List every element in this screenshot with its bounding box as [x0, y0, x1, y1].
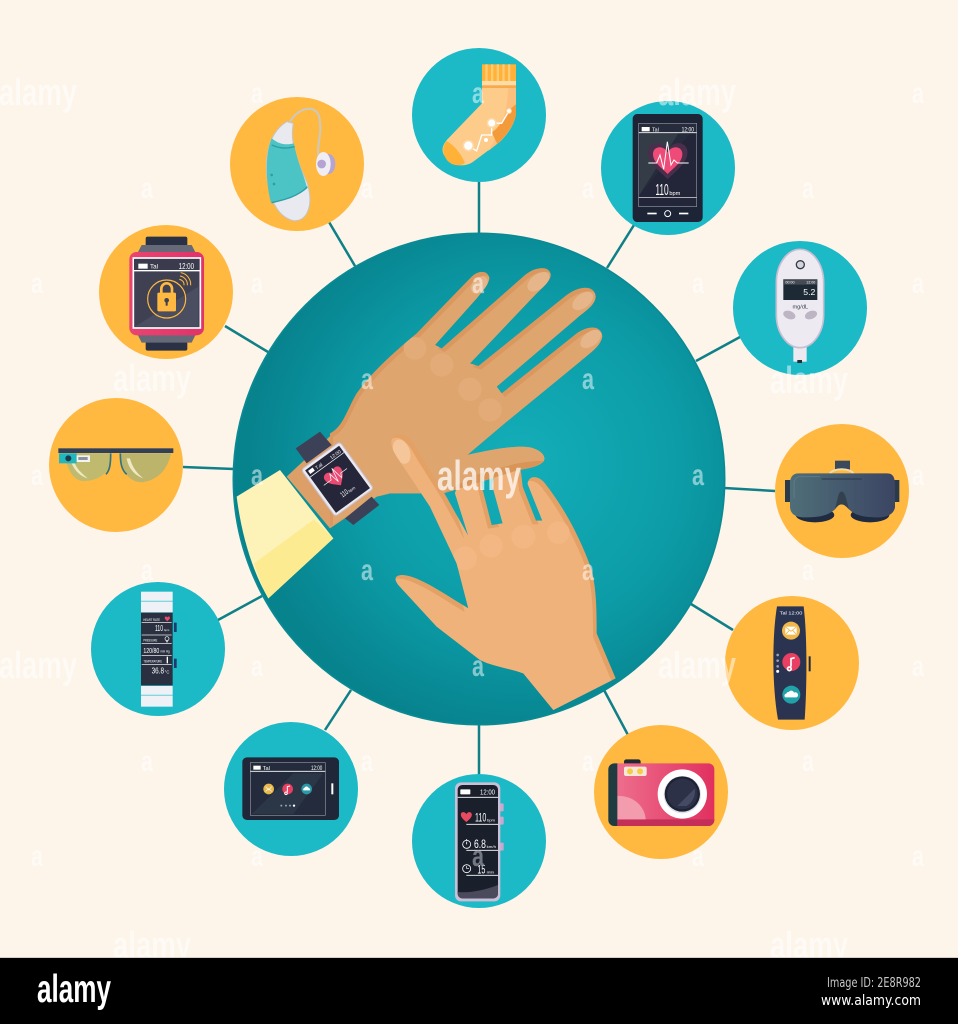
satellite: smart glasses [49, 398, 183, 532]
footer bar [0, 957, 958, 1024]
stock photo watermarks: a [31, 459, 43, 492]
satellite: fitness tracker: 15 [477, 862, 486, 876]
stock photo watermarks: alamy [0, 72, 77, 114]
satellite: VR headset [775, 424, 909, 558]
satellite: smartphone heart rate [601, 101, 735, 235]
wrist skin [287, 430, 377, 528]
satellite: smart sock [412, 48, 546, 182]
stock photo watermarks: a [692, 267, 704, 300]
stock photo watermarks: alamy [658, 72, 736, 114]
satellite: health data band: bpm [164, 628, 170, 632]
satellite: health data band: mm Hg [160, 650, 170, 654]
satellite: glucose meter: 5.2 [803, 287, 816, 297]
left hand [330, 268, 602, 526]
stock photo watermarks: a [361, 172, 373, 205]
stock photo watermarks: alamy [113, 925, 191, 967]
satellite: smartwatch with lock: 12:00 [179, 262, 194, 271]
satellite: smartphone in landscape: Tal [263, 766, 270, 772]
satellite: fitness tracker: 6.8 [474, 837, 486, 851]
stock photo watermarks: a [361, 554, 373, 587]
connector lines from center to satellites [183, 182, 775, 775]
stock photo watermarks: a [582, 554, 594, 587]
stock photo watermarks: a [912, 459, 924, 492]
stock photo watermarks: a [251, 77, 263, 110]
stock photo watermarks: alamy [770, 360, 848, 402]
satellite: fitness tracker: bpm [487, 818, 496, 823]
stock photo watermarks: a [361, 363, 373, 396]
stock photo watermarks: alamy [658, 645, 736, 687]
stock photo watermarks: a [802, 554, 814, 587]
satellite: health data band: TEMPERATURE [143, 660, 162, 664]
footer image id: Image ID: 2E8R982 [827, 975, 921, 991]
stock photo watermarks: a [912, 77, 924, 110]
satellite: glucose meter: 12:00 [806, 280, 815, 284]
stock photo watermarks: alamy [770, 925, 848, 967]
stock photo watermarks: a [472, 650, 484, 683]
smartwatch [296, 432, 379, 525]
stock photo watermarks: a [692, 459, 704, 492]
stock photo watermarks: a [692, 840, 704, 873]
satellite: fitness tracker: km/h [487, 844, 496, 849]
stock photo watermarks: a [31, 267, 43, 300]
satellite: fitness tracker: 110 [475, 811, 487, 825]
satellite: smart wristband: Tal 12:00 [780, 611, 803, 617]
stock photo watermarks: a [582, 172, 594, 205]
satellite: smartwatch with lock [99, 225, 233, 359]
satellite: smartphone heart rate: 12:00 [682, 127, 695, 133]
stock photo watermarks: a [141, 554, 153, 587]
satellite: glucose meter [733, 241, 867, 375]
footer logo: alamy [37, 968, 111, 1011]
stock photo watermarks: a [582, 363, 594, 396]
central circle rim [233, 233, 725, 725]
footer website: www.alamy.com [821, 993, 921, 1009]
satellite: hearing aid [230, 97, 364, 231]
smartwatch: T.al [314, 462, 324, 471]
satellite: glucose meter: mg/dL [792, 305, 808, 311]
central illustration: hands with smartwatch [233, 233, 725, 725]
stock photo watermarks: a [472, 840, 484, 873]
satellite: health data band: HEART RATE [143, 618, 160, 622]
stock photo watermarks: a [251, 267, 263, 300]
stock photo watermarks: a [361, 745, 373, 778]
satellite: smartphone heart rate: Tal [652, 127, 659, 133]
satellite: smart wristband [725, 596, 859, 730]
smartwatch: bpm [348, 486, 356, 493]
stock photo watermarks: a [251, 459, 263, 492]
stock photo watermarks: a [912, 840, 924, 873]
satellite: smartphone heart rate: bpm [669, 191, 681, 197]
satellite: health data band: 36.8 [152, 666, 164, 676]
stock photo watermarks: alamy [0, 645, 77, 687]
satellite: health data band: °C [165, 670, 169, 675]
satellite: pink camera [594, 725, 728, 859]
stock photo watermarks: alamy [113, 358, 191, 400]
stock photo watermarks: a [472, 267, 484, 300]
stock photo watermarks: a [251, 840, 263, 873]
left thumb over fingers [443, 447, 544, 493]
stock photo watermarks: a [802, 745, 814, 778]
satellite: smartphone in landscape: 12:00 [311, 765, 323, 772]
central circle [233, 233, 725, 725]
satellite: smartphone in landscape [224, 722, 358, 856]
satellite: health data band: 110 [155, 624, 163, 633]
stock photo watermarks: a [912, 267, 924, 300]
stock photo watermarks: a [31, 840, 43, 873]
stock photo watermarks: a [472, 77, 484, 110]
satellite: health data band: PRESSURE [143, 639, 158, 643]
stock photo watermarks: alamy [437, 452, 521, 499]
smartwatch: 12:00 [329, 449, 343, 461]
satellite: smartwatch with lock: Tal [150, 264, 158, 271]
satellite: smartphone heart rate: 110 [655, 182, 669, 199]
satellite: fitness tracker: 12:00 [480, 787, 495, 796]
stock photo watermarks: a [912, 650, 924, 683]
stock photo watermarks: a [802, 172, 814, 205]
stock photo watermarks: a [251, 650, 263, 683]
sleeve [237, 470, 333, 598]
stock photo watermarks: a [141, 172, 153, 205]
smartwatch: 110 [339, 487, 350, 499]
stock photo watermarks: a [582, 745, 594, 778]
satellite: health data band [91, 582, 225, 716]
right hand [383, 430, 623, 717]
satellite: health data band: 120/80 [143, 646, 159, 655]
stock photo watermarks: a [141, 745, 153, 778]
satellite: fitness tracker [412, 774, 546, 908]
satellite: glucose meter: 00:00 [785, 280, 794, 284]
satellite: fitness tracker: min [487, 869, 494, 874]
